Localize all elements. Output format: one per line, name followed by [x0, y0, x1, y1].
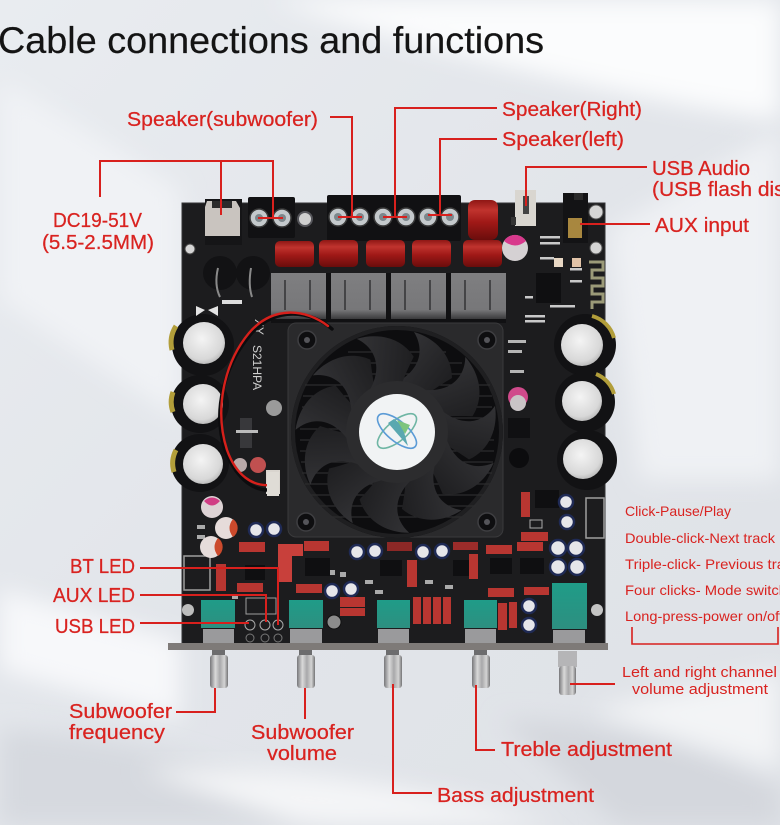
smd details: XY — [252, 319, 266, 335]
fan screws — [297, 331, 496, 531]
label: subwoofer volume: Subwoofer — [251, 722, 354, 744]
smd details — [184, 300, 604, 642]
bluetooth chip and antenna — [525, 236, 603, 322]
pink electrolytic — [502, 235, 528, 261]
label: treble adjustment: Treble adjustment — [501, 739, 672, 761]
button functions list — [625, 503, 780, 624]
knobs — [210, 650, 577, 695]
pink and orange capacitors — [200, 496, 238, 558]
label: usb led: USB LED — [55, 616, 135, 638]
label: speaker subwoofer: Speaker(subwoofer) — [127, 109, 318, 131]
fan hub — [346, 381, 448, 483]
label: speaker right: Speaker(Right) — [502, 99, 642, 121]
button functions list: Four clicks- Mode switch — [625, 582, 780, 598]
label: aux input: AUX input — [655, 215, 749, 237]
aux jack — [563, 193, 588, 243]
subwoofer terminal — [248, 197, 295, 238]
title: Cable connections and functions — [0, 20, 544, 61]
label: aux led: AUX LED — [53, 585, 135, 607]
volume pots — [201, 583, 587, 643]
label: subwoofer volume: volume — [267, 743, 337, 765]
small electrolytic capacitors — [249, 495, 585, 632]
dc jack — [205, 199, 242, 245]
red film capacitors — [275, 200, 502, 267]
small red resistors — [216, 492, 549, 630]
metal strip — [168, 643, 608, 650]
heat sink fins — [300, 352, 494, 517]
label: subwoofer frequency: frequency — [69, 722, 165, 744]
label: dc voltage: DC19-51V — [53, 210, 143, 232]
button functions list: Long-press-power on/off — [625, 608, 780, 624]
fan wire — [220, 313, 332, 496]
fan — [285, 318, 511, 544]
black discs — [203, 256, 270, 297]
label: bt led: BT LED — [70, 556, 135, 578]
fan logo — [372, 408, 422, 454]
fan blades — [285, 318, 511, 544]
button functions list: Click-Pause/Play — [625, 503, 731, 519]
smd details: S21HPA — [250, 345, 264, 390]
electrolytic capacitors left — [171, 314, 234, 492]
amplifier board — [168, 190, 617, 695]
label: volume adjustment: volume adjustment — [632, 681, 769, 698]
label: volume adjustment: Left and right channel — [622, 664, 777, 681]
label: speaker left: Speaker(left) — [502, 129, 624, 151]
label: usb audio: USB Audio — [652, 158, 750, 180]
label: dc jack size: (5.5-2.5MM) — [42, 232, 154, 254]
label: volume adjustment — [622, 664, 777, 698]
connector lines — [100, 108, 650, 793]
usb connector — [511, 190, 536, 226]
bracket — [632, 627, 778, 644]
electrolytic capacitors right — [554, 314, 617, 490]
mounting holes — [182, 205, 603, 629]
pcb — [182, 203, 605, 644]
button functions list: Double-click-Next track — [625, 530, 776, 546]
label: bass adjustment: Bass adjustment — [437, 785, 594, 807]
speaker terminal — [327, 195, 461, 241]
inductors — [271, 273, 506, 323]
label: subwoofer frequency: Subwoofer — [69, 701, 172, 723]
